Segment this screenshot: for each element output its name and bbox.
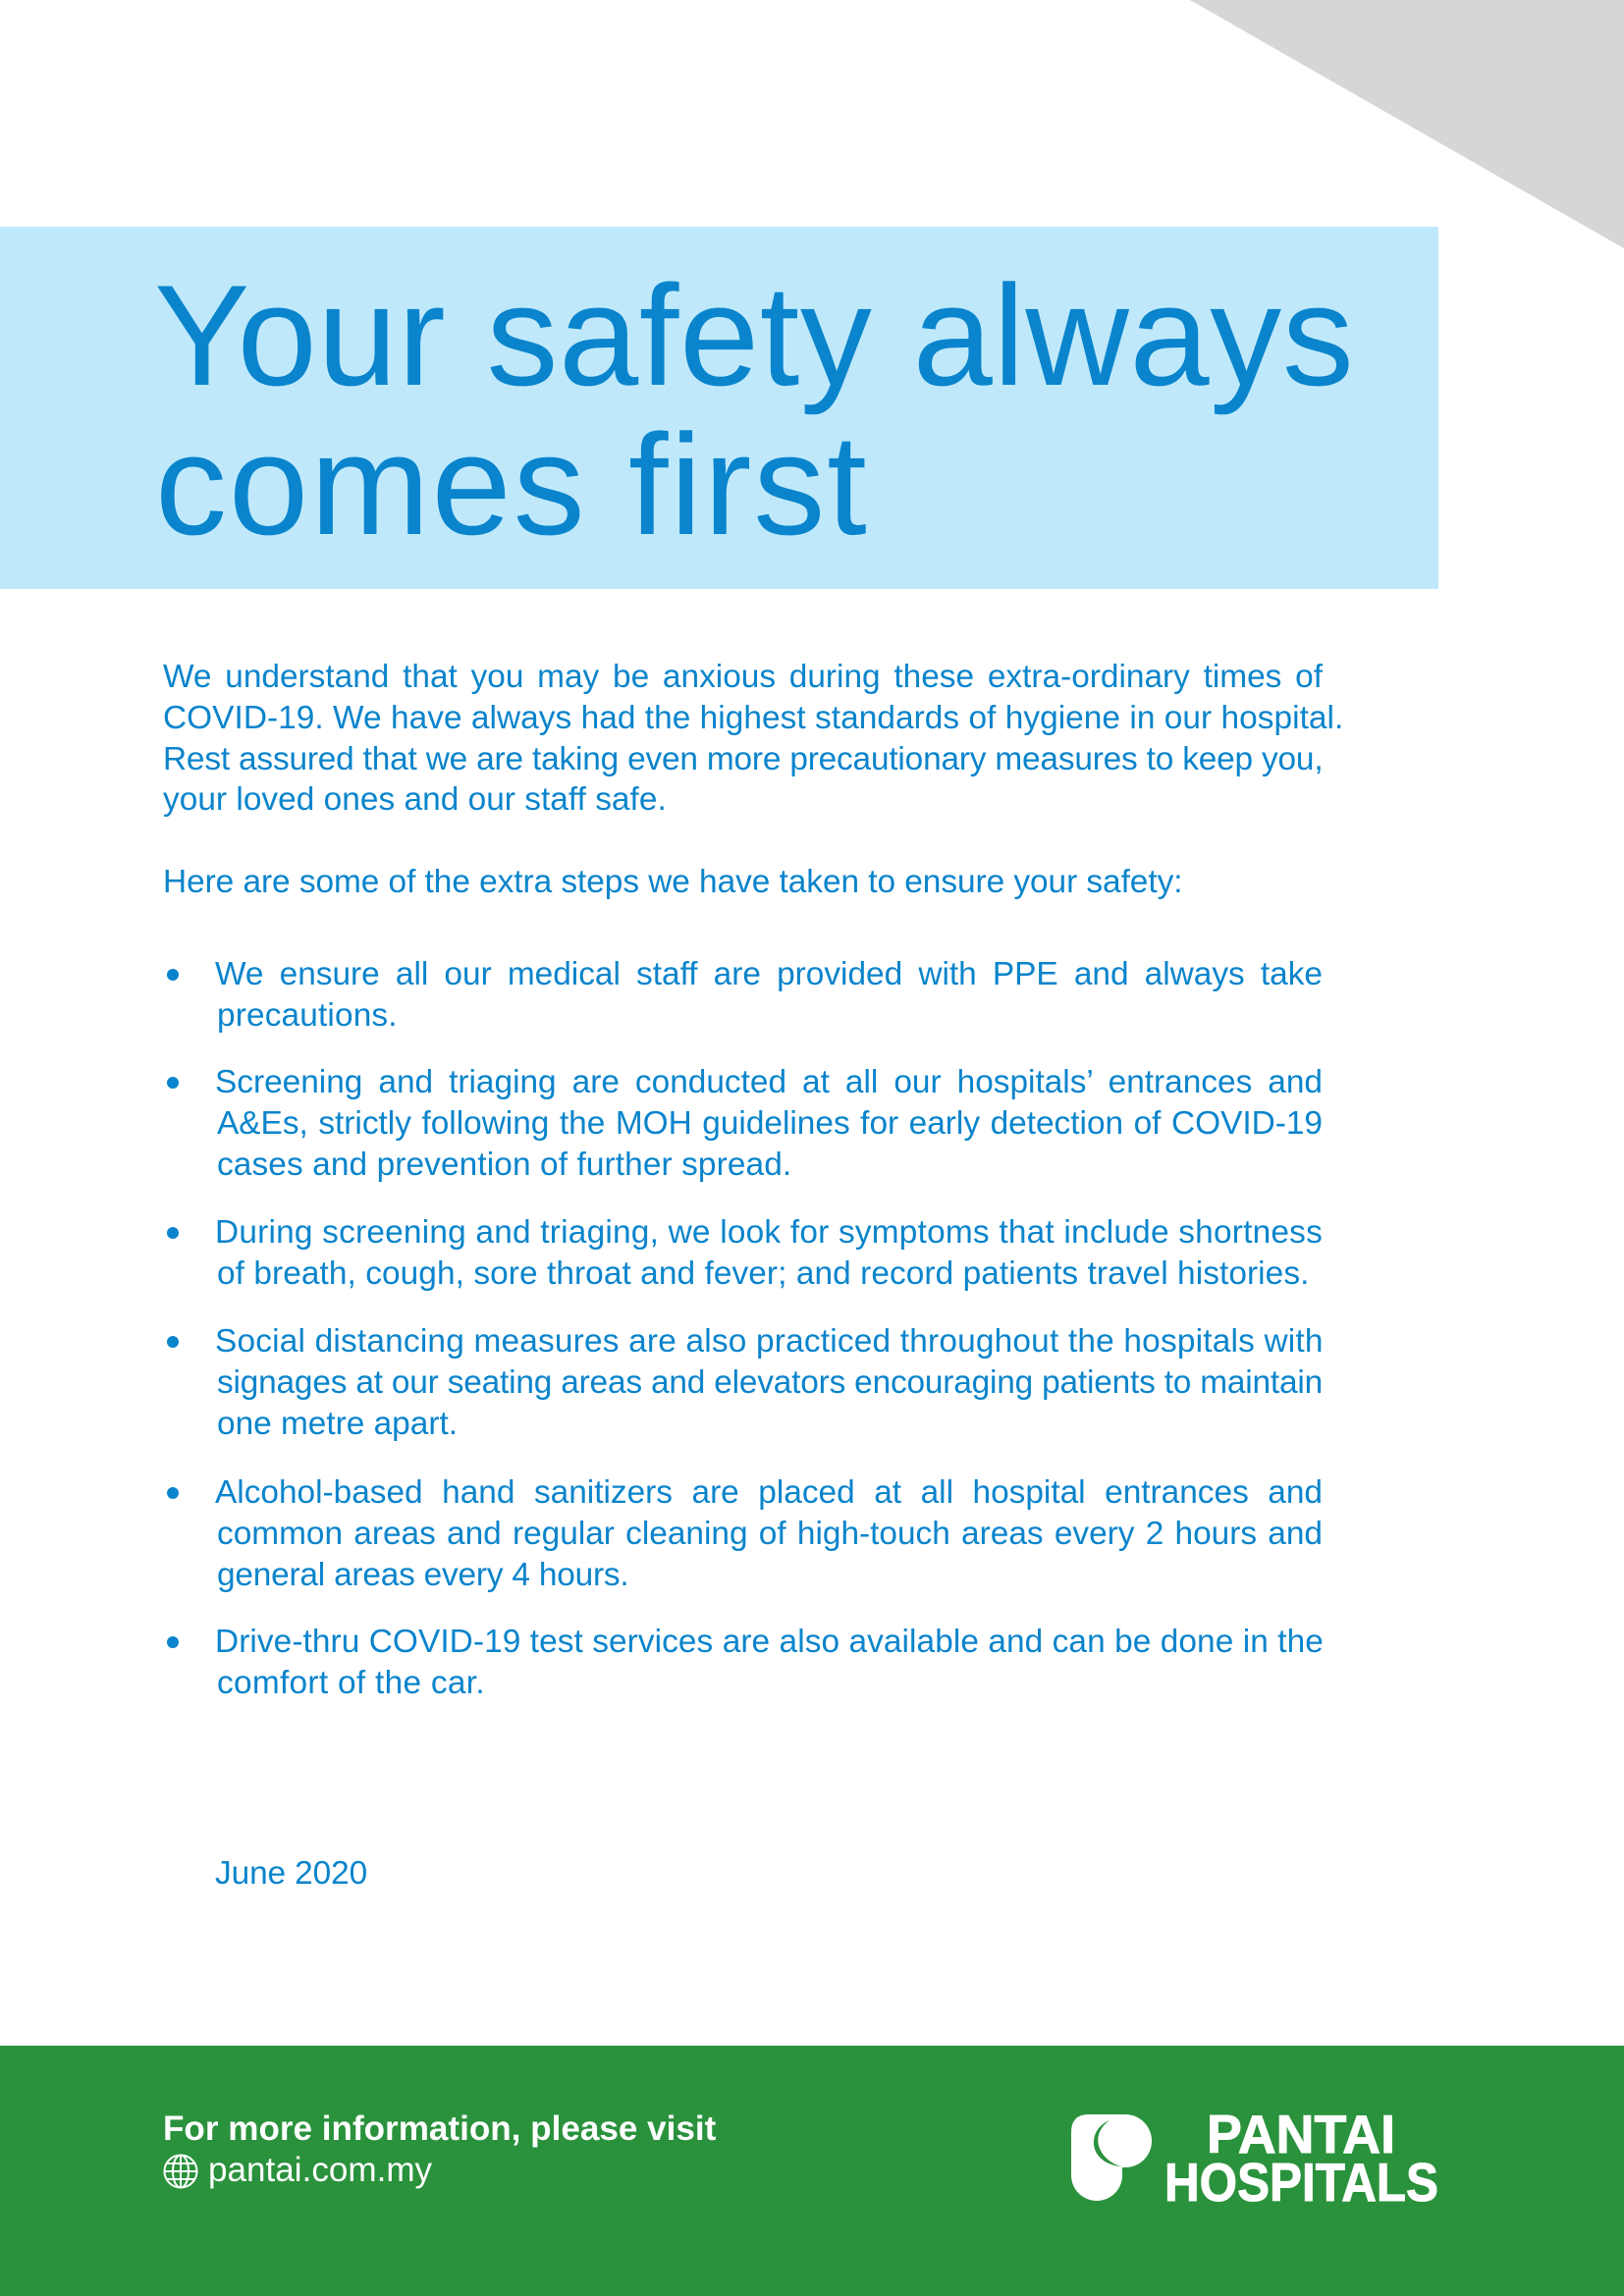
bullet 3 [167,1214,1323,1292]
bullet 4: signages at our seating areas and elevators encouraging patients to maintain [217,1364,1323,1400]
footer heading: For more information, please visit [163,2109,716,2148]
bullet list [167,956,1324,1700]
intro paragraph: your loved ones and our staff safe. [163,781,667,818]
icon: globe [163,2154,198,2189]
bullet 4: one metre apart. [217,1406,458,1441]
bullet 6 [167,1624,1324,1700]
website address: pantai.com.my [208,2150,432,2189]
bullet 5: common areas and regular cleaning of high-touch areas every 2 hours and [217,1516,1323,1551]
bullet 3: of breath, cough, sore throat and fever; and record patients travel histories. [217,1255,1309,1292]
bullet 1 [167,956,1323,1034]
bullet 1: precautions. [217,997,398,1034]
title: Your safety always [154,255,1354,415]
bullet 3: During screening and triaging, we look for symptoms that include shortness [215,1214,1323,1251]
bullet 6: Drive-thru COVID-19 test services are also available and can be done in the [215,1624,1324,1659]
bullet 1: We ensure all our medical staff are provided with PPE and always take [215,956,1323,992]
bullet 2: A&Es, strictly following the MOH guidelines for early detection of COVID-19 [217,1105,1323,1141]
intro paragraph: Rest assured that we are taking even more precautionary measures to keep you, [163,741,1323,777]
intro paragraph: COVID-19. We have always had the highest standards of hygiene in our hospital. [163,700,1343,736]
bullet 6: comfort of the car. [217,1665,485,1700]
bullet 5 [167,1474,1323,1592]
bullet 5: general areas every 4 hours. [217,1557,628,1592]
bullet 4 [167,1323,1324,1441]
decorative corner triangle [1190,0,1624,248]
lead-in sentence: Here are some of the extra steps we have taken to ensure your safety: [163,864,1182,900]
icon: P mark [1071,2114,1152,2201]
bullet 2: Screening and triaging are conducted at all our hospitals’ entrances and [215,1064,1323,1099]
date: June 2020 [215,1855,367,1892]
bullet 2: cases and prevention of further spread. [217,1147,791,1182]
bullet 2 [167,1064,1323,1182]
footer band [0,2046,1624,2296]
logo wordmark [1164,2104,1438,2213]
title: comes first [155,404,869,564]
title [154,255,1354,564]
intro paragraph: We understand that you may be anxious during these extra-ordinary times of [163,659,1323,695]
title banner [0,227,1438,589]
bullet 5: Alcohol-based hand sanitizers are placed at all hospital entrances and [215,1474,1323,1510]
logo: Pantai Hospitals [1071,2106,1438,2213]
intro paragraph [163,659,1343,818]
bullet 4: Social distancing measures are also practiced throughout the hospitals with [215,1323,1324,1359]
footer call to action [163,2109,716,2189]
